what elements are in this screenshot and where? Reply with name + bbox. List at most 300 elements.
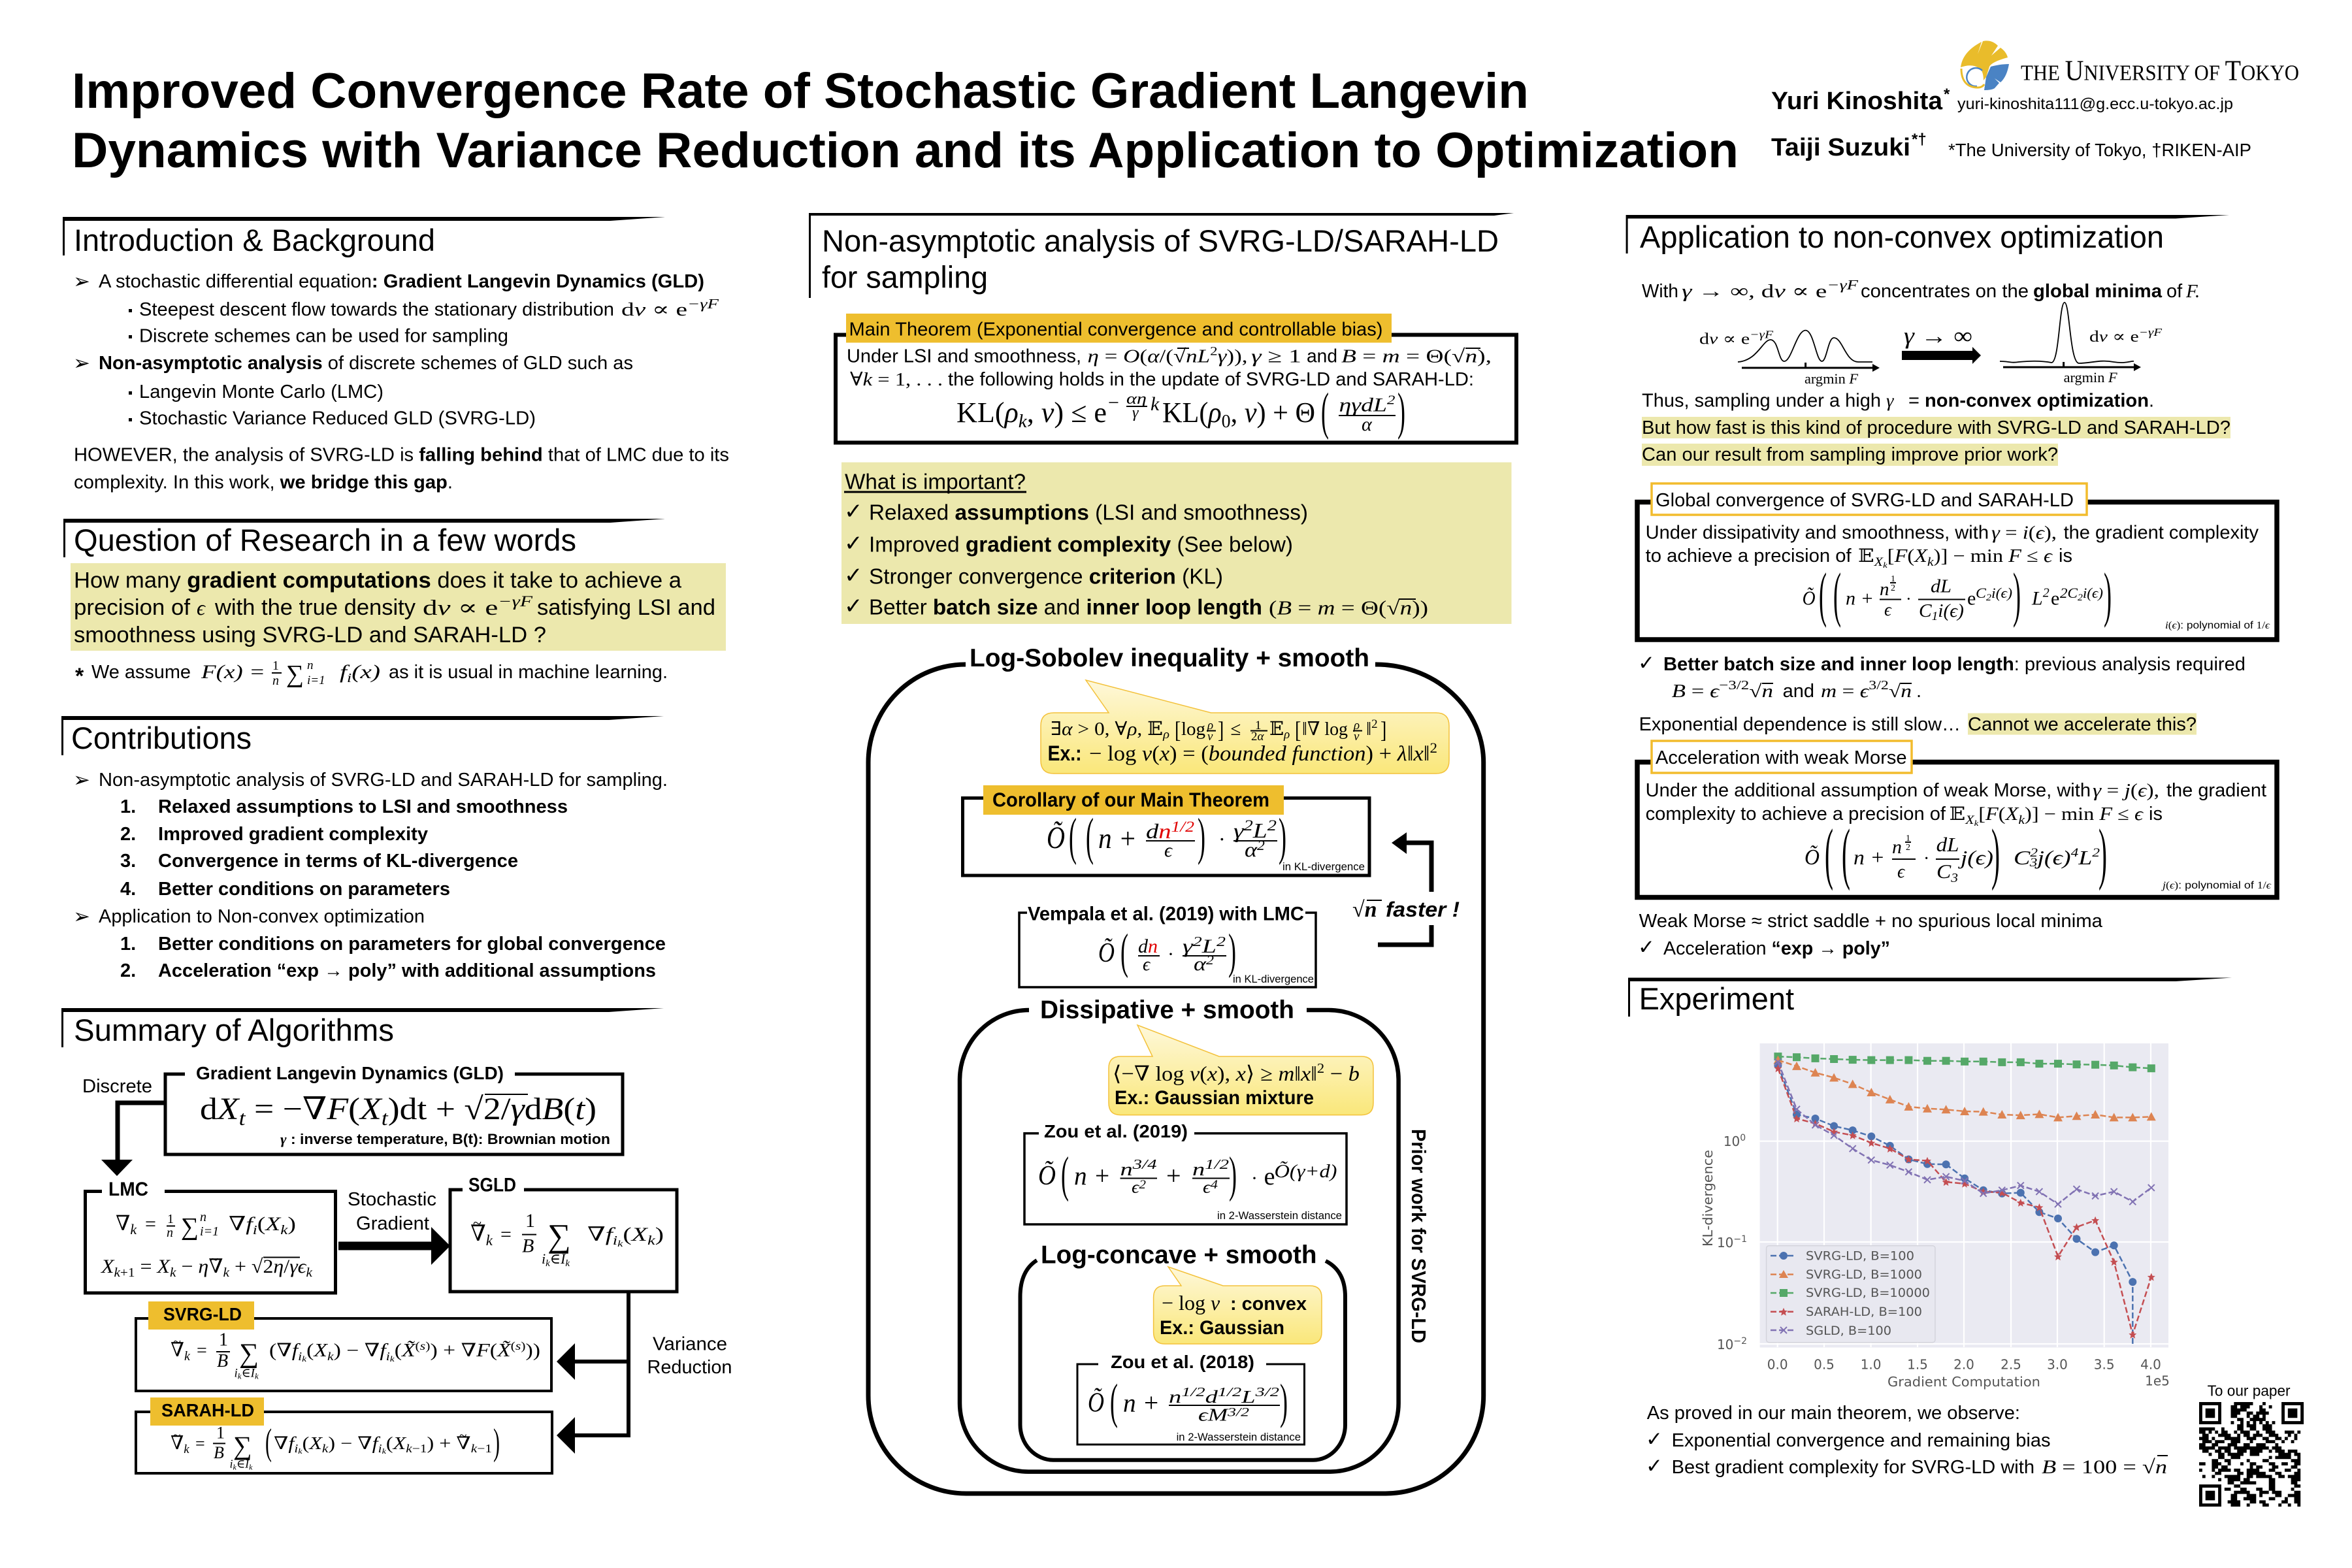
diagram: distribution concentrates bbox=[1699, 302, 2163, 387]
axis labels: 3.0 bbox=[2047, 1356, 2068, 1372]
box: GLD: t bbox=[382, 1106, 389, 1130]
box: main theorem bbox=[836, 314, 1516, 443]
box: global convergence: X bbox=[1874, 555, 1884, 569]
box: acceleration with weak Morse: dL bbox=[1936, 833, 1959, 856]
box: SARAH-LD: k bbox=[184, 1443, 189, 1456]
box: global convergence: )] − min bbox=[1934, 546, 2008, 566]
box: acceleration with weak Morse: γ = j(ϵ), bbox=[2093, 780, 2159, 801]
box: acceleration with weak Morse: j bbox=[2034, 846, 2044, 869]
box: SVRG-LD: ( bbox=[416, 1339, 420, 1353]
series: SVRG-LD B=100 bbox=[1778, 1066, 2132, 1345]
box: main theorem: KL(ρ bbox=[956, 397, 1019, 429]
box: corollary of main theorem: L bbox=[1252, 819, 1267, 842]
legend: SVRG-LD, B=100 bbox=[1806, 1249, 1914, 1264]
legend bbox=[1767, 1246, 1935, 1343]
box: Vempala et al. 2019: 2 bbox=[1206, 953, 1214, 968]
box: global convergence: to achieve a precision of bbox=[1646, 546, 1852, 566]
box: main theorem: and bbox=[1307, 346, 1337, 367]
box: acceleration with weak Morse: L bbox=[2078, 846, 2092, 869]
box: global convergence: 2 bbox=[1891, 583, 1895, 593]
panel: what is important: (B = m = Θ(√ n)) bbox=[1269, 596, 1428, 619]
box: main theorem: η = O(α/(√nL bbox=[1087, 346, 1206, 367]
box: SARAH-LD bbox=[136, 1397, 552, 1473]
assumption note: ∑ bbox=[286, 661, 304, 688]
text block: GLD bullets: A stochastic differential equation: Gradient Langevin Dynamics (GLD) bbox=[99, 271, 704, 292]
authors bbox=[1771, 86, 2251, 161]
heading: Contributions bbox=[61, 716, 664, 755]
box: global convergence bbox=[1637, 483, 2277, 640]
box: GLD: dX bbox=[200, 1092, 237, 1126]
box: global convergence: γ = i(ϵ), bbox=[1991, 523, 2057, 544]
callout: LSI definition: ] bbox=[1380, 717, 1386, 743]
text: batch size and slow note: −3/2 bbox=[1719, 678, 1749, 693]
callout: LSI definition: [ bbox=[1295, 717, 1301, 743]
box: Zou et al. 2018: Zou et al. (2018) bbox=[1111, 1352, 1254, 1372]
assumption note: ( bbox=[351, 661, 362, 683]
box: SVRG-LD: ( bbox=[395, 1341, 402, 1361]
box: acceleration with weak Morse: 3 bbox=[2029, 856, 2037, 870]
box: SGLD: k bbox=[617, 1239, 623, 1249]
callout: LSI definition: ‖ bbox=[1366, 719, 1371, 740]
box: Zou et al. 2019: n + bbox=[1074, 1161, 1111, 1190]
axis labels: 10 bbox=[1717, 1235, 1733, 1250]
box: Vempala et al. 2019: Õ bbox=[1098, 938, 1115, 968]
assumption note: i bbox=[347, 671, 351, 685]
box: acceleration with weak Morse bbox=[1637, 741, 2277, 898]
box: main theorem: ( bbox=[1321, 383, 1329, 440]
arrow: discrete: Discrete bbox=[82, 1076, 152, 1097]
heading: Experiment bbox=[1628, 977, 2232, 1017]
contributions list: 1. bbox=[120, 934, 136, 955]
box: corollary of main theorem: n + bbox=[1098, 823, 1137, 855]
assumption note: n bbox=[307, 659, 314, 672]
box: global convergence: ( bbox=[1819, 561, 1827, 629]
box: acceleration with weak Morse: n bbox=[1892, 836, 1902, 858]
heading: Non-asymptotic analysis: Non-asymptotic analysis of SVRG-LD/SARAH-LD bbox=[822, 223, 1499, 258]
box: Vempala et al. 2019: 2 bbox=[1193, 934, 1202, 949]
box: global convergence: ( bbox=[1833, 561, 1841, 629]
callout: LSI definition: 2 bbox=[1371, 717, 1378, 731]
box: SVRG-LD: B bbox=[217, 1351, 228, 1371]
panel: contributions bbox=[61, 716, 668, 981]
box: SVRG-LD: k bbox=[184, 1349, 191, 1364]
box: Zou et al. 2019: 3/4 bbox=[1132, 1156, 1157, 1172]
text: batch size and slow note: √ bbox=[1889, 681, 1901, 702]
box: SGLD: ) bbox=[655, 1224, 664, 1245]
panel: what is important: ✓ bbox=[844, 563, 862, 589]
box: SGLD: k bbox=[565, 1258, 570, 1269]
arrow: sqrt n faster: faster ! bbox=[1386, 898, 1460, 921]
box: global convergence: e bbox=[2051, 588, 2059, 609]
arrow: gamma to infinity: γ → ∞ bbox=[1904, 323, 1972, 349]
box: SVRG-LD: X̃ bbox=[401, 1341, 416, 1361]
box: acceleration with weak Morse: ϵ bbox=[1897, 862, 1906, 882]
legend: SARAH-LD, B=100 bbox=[1806, 1305, 1922, 1319]
box: Zou et al. 2018: n bbox=[1169, 1387, 1177, 1407]
box: SVRG-LD: F(X̃ bbox=[476, 1341, 508, 1361]
highlighted question bbox=[71, 563, 726, 651]
box: LMC: X bbox=[156, 1256, 171, 1277]
axis labels: 3.5 bbox=[2094, 1356, 2115, 1372]
box: corollary of main theorem: α bbox=[1245, 838, 1256, 861]
box: acceleration with weak Morse: F ≤ ϵ bbox=[2099, 804, 2142, 825]
box: SVRG-LD bbox=[136, 1301, 551, 1391]
box: SGLD: ∇ bbox=[470, 1222, 486, 1246]
box: LMC: i bbox=[253, 1223, 257, 1237]
box: global convergence: k bbox=[1927, 555, 1934, 569]
box: main theorem: ν) ≤ e bbox=[1041, 397, 1107, 429]
box: corollary of main theorem: dn bbox=[1146, 819, 1169, 843]
box: Zou et al. 2018: Õ bbox=[1088, 1388, 1104, 1418]
assumption note: as it is usual in machine learning. bbox=[389, 662, 668, 683]
text block: GLD bullets: Langevin Monte Carlo (LMC) bbox=[139, 382, 384, 402]
box: SARAH-LD: 1 bbox=[216, 1423, 225, 1443]
box: GLD: γ : inverse temperature, B(t): Brownian motion bbox=[280, 1131, 610, 1147]
curve: multimodal density: argmin F bbox=[1805, 370, 1859, 387]
box: SVRG-LD: (∇f bbox=[269, 1341, 297, 1361]
box: SARAH-LD: f bbox=[372, 1433, 381, 1453]
title: Dynamics with Variance Reduction and its Application to Optimization bbox=[72, 123, 1739, 178]
box: acceleration with weak Morse: Acceleration with weak Morse bbox=[1656, 747, 1907, 768]
box: LMC: = bbox=[135, 1256, 157, 1277]
box: acceleration with weak Morse: ) bbox=[2099, 815, 2107, 892]
highlighted question: satisfying LSI and bbox=[537, 595, 715, 620]
box: SARAH-LD: k bbox=[406, 1442, 413, 1455]
text block: GLD bullets: dν ∝ e bbox=[621, 299, 676, 320]
box: main theorem: the following holds in the update of SVRG-LD and SARAH-LD: bbox=[948, 369, 1474, 390]
callout: LSI definition: − log ν(x) = (bounded function ) + λ‖x‖ bbox=[1089, 742, 1429, 766]
box: main theorem: )), bbox=[1226, 346, 1244, 367]
callout: LSI definition: ≤ bbox=[1231, 719, 1241, 740]
QR code: to our paper: To our paper bbox=[2208, 1382, 2291, 1399]
box: LMC: ∇f bbox=[229, 1213, 252, 1235]
text: observations: B = 100 = √ n bbox=[2042, 1456, 2167, 1478]
box: Zou et al. 2018: n + bbox=[1123, 1388, 1160, 1418]
arrow: stochastic gradient: Gradient bbox=[356, 1213, 429, 1234]
callout: dissipativity: b bbox=[1348, 1062, 1360, 1085]
box: SVRG-LD: f bbox=[380, 1341, 389, 1361]
box: SARAH-LD: ~ bbox=[173, 1428, 180, 1443]
curve: multimodal density: −γF bbox=[1750, 329, 1774, 341]
box: main theorem: Main Theorem (Exponential convergence and controllable bias) bbox=[849, 319, 1382, 340]
box: GLD: = −∇ bbox=[246, 1092, 327, 1126]
arrow: gamma to infinity bbox=[1902, 323, 1981, 364]
box: SGLD: i bbox=[613, 1233, 617, 1248]
curve: multimodal density bbox=[1699, 329, 1880, 387]
authors: yuri-kinoshita111@g.ecc.u-tokyo.ac.jp bbox=[1957, 95, 2233, 113]
box: acceleration with weak Morse: Under the additional assumption of weak Morse, with bbox=[1646, 780, 2091, 801]
box: Zou et al. 2019: 4 bbox=[1211, 1178, 1218, 1192]
box: Zou et al. 2019: ϵ bbox=[1203, 1177, 1209, 1197]
frame: dissipative: Dissipative + smooth bbox=[1040, 996, 1294, 1024]
box: LMC: − bbox=[176, 1256, 198, 1277]
box: global convergence: 𝔼 bbox=[1858, 546, 1872, 566]
box: SVRG-LD: 1 bbox=[219, 1330, 228, 1350]
authors: Taiji Suzuki bbox=[1771, 134, 1910, 161]
frame: dissipative bbox=[960, 996, 1399, 1472]
heading: Non-asymptotic analysis: for sampling bbox=[822, 260, 988, 295]
callout: dissipativity: Ex.: Gaussian mixture bbox=[1115, 1087, 1314, 1109]
frame: log-Sobolev bbox=[868, 644, 1484, 1494]
panel: experiment bbox=[1628, 977, 2302, 1505]
text block: GLD bullets: complexity. In this work, we bridge this gap. bbox=[74, 472, 453, 493]
box: SVRG-LD: i bbox=[234, 1367, 238, 1380]
text: observations: ✓ bbox=[1646, 1454, 1663, 1478]
box: LMC: n bbox=[167, 1226, 173, 1240]
heading: Summary of Algorithms: Summary of Algorithms bbox=[74, 1013, 394, 1047]
box: SVRG-LD: ∑ bbox=[239, 1339, 259, 1369]
text block: GLD bullets: HOWEVER, the analysis of SVRG-LD is falling behind that of LMC due to its bbox=[74, 445, 729, 466]
assumption note bbox=[75, 659, 668, 689]
axis labels: 1.0 bbox=[1861, 1356, 1882, 1372]
box: acceleration with weak Morse: ( bbox=[1842, 815, 1850, 892]
box: SARAH-LD: ∈ bbox=[237, 1458, 245, 1471]
callout: convex: − log ν bbox=[1162, 1291, 1220, 1315]
box: corollary of main theorem: ) bbox=[1198, 808, 1205, 866]
highlighted question: precision of bbox=[74, 595, 191, 620]
box: acceleration with weak Morse: j(ϵ): polynomial of 1/ϵ bbox=[2161, 880, 2272, 891]
box: Zou et al. 2018: 3/2 bbox=[1227, 1406, 1250, 1419]
axis labels: −2 bbox=[1733, 1336, 1747, 1347]
box: acceleration with weak Morse: (ϵ) bbox=[2044, 846, 2069, 869]
box: LMC: n bbox=[200, 1210, 206, 1224]
arrow: stochastic gradient bbox=[338, 1189, 450, 1265]
panel: introduction bbox=[63, 217, 729, 493]
box: Vempala et al. 2019: L bbox=[1201, 936, 1217, 957]
arrow: sqrt n faster bbox=[1352, 832, 1460, 945]
text: thus and questions: non-convex optimization bbox=[1925, 391, 2149, 412]
box: global convergence: is bbox=[2059, 546, 2072, 566]
box: LMC: 1 bbox=[167, 1212, 174, 1226]
box: acceleration with weak Morse: k bbox=[1974, 818, 1979, 828]
label: prior work: Prior work for SVRG-LD bbox=[1407, 1129, 1430, 1343]
assumption note: x) bbox=[360, 661, 378, 683]
box: SARAH-LD: ) − ∇ bbox=[328, 1433, 372, 1453]
assumption note: f bbox=[340, 661, 345, 683]
text block: GLD bullets: Stochastic Variance Reduced GLD (SVRG-LD) bbox=[139, 408, 536, 429]
box: acceleration with weak Morse: j(ϵ) bbox=[1957, 846, 1993, 869]
box: SARAH-LD: i bbox=[230, 1458, 233, 1471]
box: acceleration with weak Morse: 2 bbox=[2030, 846, 2038, 860]
text block: GLD bullets: Steepest descent flow towards the stationary distribution bbox=[139, 299, 614, 320]
box: Vempala et al. 2019 bbox=[1019, 904, 1316, 987]
box: Zou et al. 2019: e bbox=[1264, 1163, 1275, 1190]
box: GLD: Gradient Langevin Dynamics (GLD) bbox=[196, 1063, 504, 1083]
box: SARAH-LD: k bbox=[298, 1446, 302, 1456]
box: Vempala et al. 2019: ) bbox=[1228, 924, 1236, 979]
box: SVRG-LD: ) + ∇ bbox=[430, 1341, 476, 1361]
assumption note: * bbox=[75, 664, 84, 689]
box: corollary of main theorem: ϵ bbox=[1164, 840, 1173, 861]
text: thus and questions bbox=[1642, 391, 2230, 466]
box: SVRG-LD: ∇ bbox=[171, 1339, 184, 1361]
box: LMC: η∇ bbox=[198, 1256, 222, 1277]
box: SARAH-LD: B bbox=[214, 1443, 224, 1462]
text: weak Morse note bbox=[1638, 911, 2103, 959]
heading: Contributions: Contributions bbox=[71, 721, 252, 755]
box: SARAH-LD: X bbox=[392, 1433, 407, 1453]
panel: what is important: ✓ bbox=[844, 593, 862, 619]
box: SARAH-LD: ( bbox=[265, 1421, 272, 1463]
box: LMC: k bbox=[130, 1221, 137, 1237]
box: SARAH-LD: ) bbox=[493, 1421, 500, 1463]
box: global convergence: n bbox=[1880, 579, 1889, 600]
callout: LSI definition bbox=[1041, 680, 1449, 774]
box: global convergence: 2 bbox=[1986, 593, 1992, 603]
box: SGLD: I bbox=[561, 1250, 565, 1267]
text: thus and questions: Thus, sampling under a high bbox=[1642, 391, 1881, 412]
text: batch size and slow note: 3/2 bbox=[1869, 678, 1889, 693]
callout: LSI definition: Ex.: bbox=[1048, 742, 1082, 765]
axis labels: 2.5 bbox=[2001, 1356, 2021, 1372]
box: global convergence: 2 bbox=[2043, 585, 2050, 600]
contributions list: Non-asymptotic analysis of SVRG-LD and SARAH-LD for sampling. bbox=[99, 770, 668, 791]
panel: what is important: ✓ bbox=[844, 531, 862, 557]
box: main theorem: ν) + Θ bbox=[1245, 397, 1318, 429]
contributions list: ➢ bbox=[73, 768, 90, 792]
box: Zou et al. 2019: ) bbox=[1229, 1147, 1237, 1202]
heading: Experiment: Experiment bbox=[1639, 981, 1794, 1016]
box: SVRG-LD: k bbox=[255, 1371, 259, 1381]
box: Zou et al. 2018: ) bbox=[1280, 1375, 1288, 1429]
text: weak Morse note: ✓ bbox=[1638, 936, 1655, 959]
text: weak Morse note: Weak Morse ≈ strict saddle + no spurious local minima bbox=[1639, 911, 2103, 932]
axis labels: KL-divergence bbox=[1700, 1150, 1716, 1247]
box: global convergence: k bbox=[1883, 560, 1887, 570]
box: SGLD: i bbox=[542, 1250, 546, 1267]
callout: LSI definition: 𝔼 bbox=[1269, 719, 1284, 740]
box: corollary of main theorem: in KL-divergence bbox=[1282, 860, 1365, 873]
text: concentration statement: of bbox=[2166, 281, 2183, 302]
text block: GLD bullets: Non-asymptotic analysis of discrete schemes of GLD such as bbox=[99, 353, 633, 374]
box: SARAH-LD: i bbox=[378, 1442, 382, 1455]
box: main theorem: k bbox=[1019, 411, 1028, 432]
box: GLD: γdB(t) bbox=[511, 1092, 595, 1126]
curve: concentrated density: dν ∝ e bbox=[2089, 329, 2133, 346]
box: global convergence: L bbox=[2032, 588, 2043, 609]
heading: Application to non-convex optimization: Application to non-convex optimization bbox=[1640, 220, 2164, 254]
text: thus and questions: . bbox=[2149, 391, 2154, 412]
box: main theorem: αη bbox=[1126, 391, 1147, 408]
callout: LSI definition: log bbox=[1181, 719, 1205, 740]
box: corollary of main theorem: ( bbox=[1069, 808, 1077, 866]
panel: what is important: Stronger convergence criterion (KL) bbox=[869, 564, 1223, 589]
logo: University of Tokyo bbox=[1961, 41, 2299, 90]
box: main theorem: γ bbox=[1132, 404, 1139, 421]
box: GLD: )dt + √2/ bbox=[388, 1092, 511, 1126]
heading: Introduction & Background: Introduction & Background bbox=[74, 223, 435, 257]
box: SGLD: ∈ bbox=[550, 1250, 561, 1267]
callout: dissipativity: ⟨−∇ log ν(x), x⟩ ≥ m‖x‖ bbox=[1113, 1062, 1316, 1085]
box: Zou et al. 2018: 1/2 bbox=[1181, 1385, 1205, 1399]
title: Improved Convergence Rate of Stochastic Gradient Langevin bbox=[72, 63, 1529, 119]
panel: what is important: ✓ bbox=[844, 498, 862, 525]
box: LMC: k bbox=[170, 1266, 177, 1280]
assumption note: i=1 bbox=[307, 674, 325, 687]
panel: what is important: Relaxed assumptions (LSI and smoothness) bbox=[869, 500, 1308, 524]
box: Vempala et al. 2019: dn bbox=[1138, 936, 1158, 957]
callout: LSI definition: 2α bbox=[1251, 730, 1265, 743]
box: global convergence: e bbox=[1967, 588, 1976, 609]
box: SARAH-LD: k bbox=[322, 1442, 329, 1455]
text: batch size and slow note: Cannot we accelerate this? bbox=[1968, 714, 2197, 735]
text: batch size and slow note: and bbox=[1783, 681, 1814, 702]
box: global convergence: i bbox=[1938, 600, 1943, 621]
box: corollary of main theorem: · bbox=[1218, 827, 1226, 851]
box: SARAH-LD: ~ bbox=[459, 1428, 466, 1443]
box: Zou et al. 2019: + bbox=[1166, 1161, 1181, 1190]
text: batch size and slow note: m = ϵ bbox=[1821, 681, 1867, 702]
axis labels: 10 bbox=[1717, 1337, 1733, 1352]
curve: concentrated density: argmin F bbox=[2064, 369, 2117, 385]
box: main theorem: B = m = Θ(√ n), bbox=[1341, 346, 1492, 367]
box: Zou et al. 2019: Zou et al. (2019) bbox=[1044, 1121, 1188, 1141]
callout: LSI definition: ν bbox=[1354, 730, 1360, 743]
box: global convergence: · bbox=[1906, 589, 1912, 608]
chart: KL-divergence vs gradient computation bbox=[1700, 1043, 2170, 1390]
box: SVRG-LD: I bbox=[251, 1367, 255, 1380]
box: global convergence: i bbox=[1991, 585, 1996, 601]
box: global convergence: (ϵ) bbox=[2087, 585, 2103, 601]
contributions list: Application to Non-convex optimization bbox=[99, 906, 425, 927]
panel: what is important: What is important? bbox=[845, 470, 1026, 494]
box: global convergence: ) bbox=[2104, 561, 2112, 629]
box: SVRG-LD: k bbox=[238, 1371, 242, 1381]
box: SGLD: k bbox=[647, 1233, 656, 1248]
box: SARAH-LD: k bbox=[471, 1442, 478, 1455]
box: LMC: k bbox=[223, 1266, 230, 1280]
box: SARAH-LD: i bbox=[294, 1442, 298, 1455]
box: SARAH-LD: ( bbox=[302, 1433, 309, 1453]
box: SARAH-LD: k bbox=[249, 1463, 253, 1472]
text: batch size and slow note: Better batch size and inner loop length: previous analysis required bbox=[1663, 654, 2246, 675]
box: global convergence: ϵ bbox=[1884, 600, 1892, 619]
text: batch size and slow note: n bbox=[1762, 681, 1773, 702]
box: SGLD: ∑ bbox=[547, 1217, 571, 1254]
panel: application to non-convex optimization bbox=[1626, 215, 2277, 959]
box: SGLD: X bbox=[630, 1224, 649, 1245]
text: concentration statement: concentrates on the bbox=[1861, 281, 2029, 302]
box: LMC bbox=[85, 1179, 336, 1293]
arrow: variance reduction: Reduction bbox=[647, 1357, 732, 1378]
contributions list: Better conditions on parameters bbox=[158, 879, 450, 900]
box: Zou et al. 2018: L bbox=[1241, 1387, 1256, 1407]
box: SVRG-LD: i bbox=[386, 1350, 390, 1363]
arrow: stochastic gradient: Stochastic bbox=[348, 1189, 436, 1210]
box: SARAH-LD: ∇ bbox=[171, 1433, 184, 1454]
box: SGLD: = bbox=[500, 1224, 512, 1245]
panel: what is important bbox=[841, 463, 1512, 624]
frame: log-concave: Log-concave + smooth bbox=[1041, 1241, 1317, 1269]
box: LMC: ~ bbox=[210, 1251, 218, 1267]
box: corollary of main theorem: 2 bbox=[1267, 817, 1277, 834]
box: GLD: t bbox=[239, 1106, 246, 1130]
box: SGLD: ∇f bbox=[587, 1224, 611, 1245]
box: acceleration with weak Morse: F(X bbox=[1985, 804, 2017, 825]
box: main theorem: − bbox=[1108, 392, 1119, 414]
callout: LSI definition: 2 bbox=[1429, 740, 1437, 756]
box: Zou et al. 2018: d bbox=[1205, 1387, 1218, 1407]
box: SGLD: k bbox=[486, 1232, 493, 1249]
box: Zou et al. 2019: in 2-Wasserstein distance bbox=[1217, 1209, 1342, 1222]
text: concentration statement: −γF bbox=[1827, 277, 1858, 293]
box: GLD: F(X bbox=[327, 1092, 379, 1126]
box: Zou et al. 2019: n bbox=[1120, 1160, 1129, 1180]
box: acceleration with weak Morse: ( bbox=[1825, 815, 1833, 892]
box: acceleration with weak Morse: [ bbox=[1978, 804, 1985, 825]
box: SARAH-LD: −1 bbox=[412, 1442, 427, 1455]
box: LMC: η/γϵ bbox=[273, 1256, 305, 1277]
